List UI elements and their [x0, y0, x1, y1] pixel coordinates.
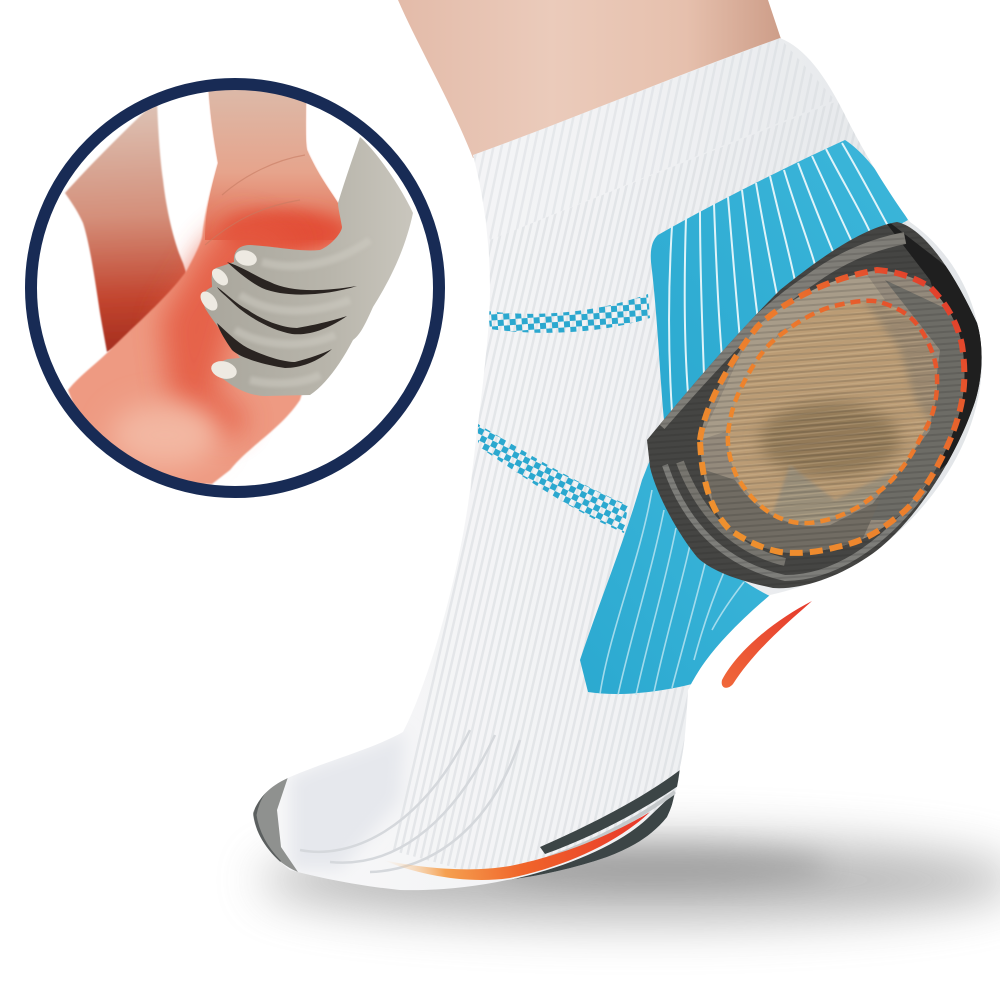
- leg skin: [398, 0, 782, 158]
- red arch swoosh: [722, 601, 812, 688]
- toe cap: [252, 771, 298, 872]
- blue upper panel stripes: [669, 143, 888, 412]
- sock body: [253, 38, 982, 890]
- heel redness: [223, 210, 347, 254]
- back leg: [65, 100, 195, 352]
- fingernails: [235, 250, 257, 266]
- ring lower dark: [705, 470, 880, 556]
- ring mesh band: [700, 270, 964, 553]
- floor shadow: [260, 838, 1000, 922]
- ring upper tan: [700, 265, 885, 440]
- orange sole flare: [383, 812, 650, 880]
- dark heel band: [647, 222, 982, 588]
- toe seam ribs: [300, 730, 520, 872]
- sole stripes: [540, 770, 680, 854]
- check band upper: [488, 294, 650, 333]
- heel cup: [640, 215, 990, 600]
- ankle crease: [205, 155, 305, 245]
- hand silhouette: [203, 137, 413, 396]
- orange dashed ring inner: [728, 301, 937, 523]
- grey band stripes: [665, 465, 925, 578]
- finger gaps: [227, 262, 357, 295]
- navy ring: [31, 84, 439, 492]
- hand: [197, 137, 413, 396]
- inset circle: heel pain: [31, 80, 439, 492]
- front leg and foot: [68, 80, 345, 484]
- sole pale: [110, 403, 220, 467]
- toe shading: [290, 730, 405, 870]
- blue lower panel stripes: [600, 490, 744, 695]
- heel core shadow: [760, 402, 900, 478]
- upper leg tone: [205, 80, 345, 240]
- sock: [252, 38, 982, 890]
- blue lower panel: [580, 460, 772, 694]
- arch redness: [147, 219, 255, 446]
- ring right dark: [871, 280, 964, 520]
- blue upper panel: [651, 140, 908, 420]
- finger highlights: [235, 240, 370, 383]
- lower grey patches: [772, 466, 894, 523]
- inner tan mesh: [728, 300, 938, 523]
- black right band: [887, 223, 982, 470]
- cuff ribbing: [473, 38, 835, 240]
- orange dashed ring outer: [700, 270, 964, 553]
- upper right grey: [863, 301, 937, 421]
- check band lower: [478, 424, 628, 533]
- knit ribbing: [390, 100, 910, 880]
